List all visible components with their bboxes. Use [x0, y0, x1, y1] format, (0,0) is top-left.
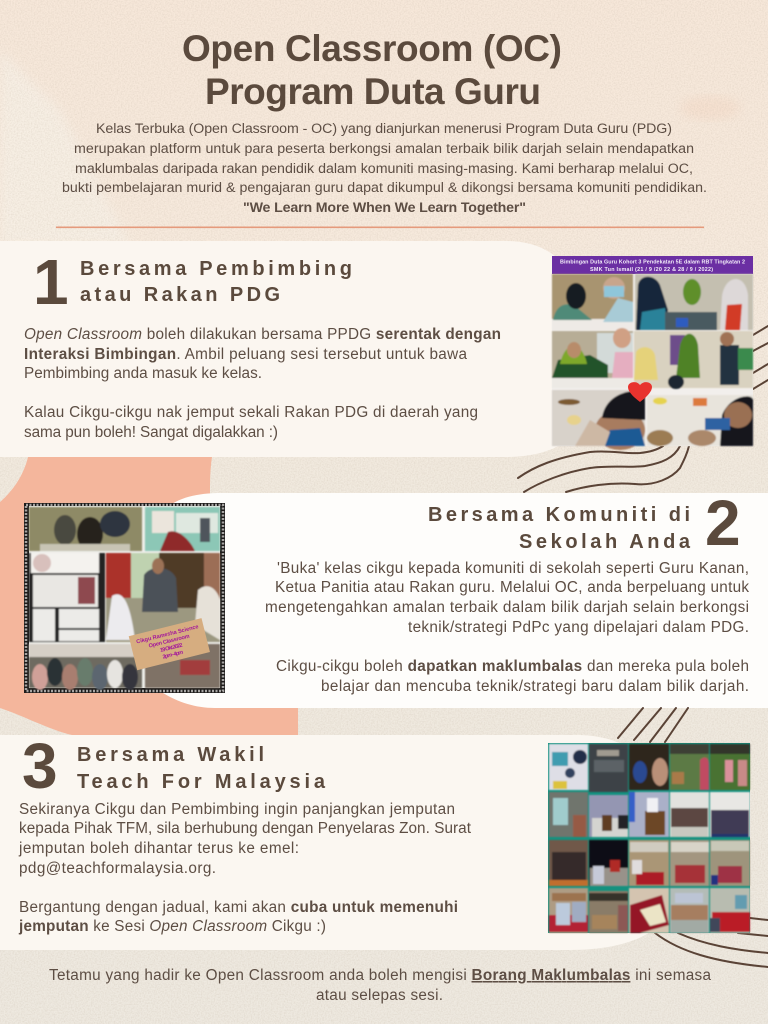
text block: section 2: 'Buka' kelas cikgu kepada komuniti di sekolah seperti Guru Kanan,	[277, 560, 749, 577]
text block: section 3: Bergantung dengan jadual, kami akan cuba untuk memenuhi	[19, 899, 458, 916]
heading: section 2	[428, 487, 741, 559]
title: Open Classroom (OC)	[182, 28, 562, 69]
panel: section 2 background	[163, 493, 768, 708]
intro text	[62, 121, 707, 216]
decorative curve group: section 1	[518, 326, 768, 492]
text block: section 2	[265, 560, 749, 695]
intro text: Kelas Terbuka (Open Classroom - OC) yang dianjurkan menerusi Program Duta Guru (PDG)	[96, 121, 672, 137]
text block: section 3: pdg@teachformalaysia.org.	[19, 860, 216, 877]
collage header banner	[552, 256, 753, 274]
text block: section 1: Pembimbing anda masuk ke kelas.	[24, 365, 262, 382]
heading: section 1: atau Rakan PDG	[80, 284, 280, 306]
text block: section 3: jemputan boleh dihantar terus ke emel:	[18, 840, 299, 857]
text block: section 2: Ketua Panitia atau Rakan guru. Melalui OC, anda berpeluang untuk	[275, 579, 749, 596]
text block: section 1: Kalau Cikgu-cikgu nak jemput sekali Rakan PDG di daerah yang	[24, 404, 478, 421]
heading: section 1: Bersama Pembimbing	[80, 258, 352, 280]
intro text: maklumbalas daripada rakan pendidik dalam komuniti masing-masing. Kami berharap melalui OC,	[75, 161, 693, 177]
heading: section 3	[22, 730, 326, 802]
text block: section 1: sama pun boleh! Sangat digalakkan :)	[24, 424, 278, 441]
decorative curve group: section 3	[618, 708, 768, 967]
heading: section 3: Teach For Malaysia	[77, 771, 326, 793]
footer text: Tetamu yang hadir ke Open Classroom anda boleh mengisi Borang Maklumbalas ini semasa	[49, 967, 711, 984]
collage header banner: Bimbingan Duta Guru Kohort 3 Pendekatan 5E dalam RBT Tingkatan 2	[560, 260, 745, 266]
text block: section 2: mengetengahkan amalan terbaik dalam bilik darjah selain berkongsi	[265, 599, 749, 616]
text block: section 3: Sekiranya Cikgu dan Pembimbing ingin panjangkan jemputan	[19, 801, 455, 818]
title: Program Duta Guru	[205, 71, 541, 112]
intro text: "We Learn More When We Learn Together"	[243, 200, 526, 216]
text block: section 1: Interaksi Bimbingan. Ambil peluang sesi tersebut untuk bawa	[24, 346, 467, 363]
intro text: merupakan platform untuk para peserta berkongsi amalan terbaik bilik darjah selain mendapatkan	[74, 141, 694, 157]
photo collage: section 3	[548, 743, 750, 933]
photo collage: section 2	[24, 503, 225, 693]
title	[182, 28, 562, 112]
panel: section 1 background	[0, 241, 560, 457]
caption card	[129, 618, 210, 670]
heading: section 2: Bersama Komuniti di	[428, 504, 690, 526]
icon: red heart	[628, 382, 652, 402]
text block: section 3	[18, 801, 472, 935]
text block: section 1: Open Classroom boleh dilakukan bersama PPDG serentak dengan	[24, 326, 501, 343]
caption card: Cikgu Ramesha Science	[136, 624, 199, 645]
heading: section 1	[33, 246, 352, 318]
caption card: 2pm - 4pm	[162, 650, 184, 661]
panel: section 3 background	[0, 735, 660, 950]
text block: section 3: jemputan ke Sesi Open Classroom Cikgu :)	[18, 918, 326, 935]
number 2: 2	[705, 487, 741, 559]
text block: section 2: belajar dan mencuba teknik/strategi baru dalam bilik darjah.	[321, 678, 749, 695]
intro text: bukti pembelajaran murid & pengajaran guru dapat dikumpul & dikongsi bersama komuniti pendidikan.	[62, 180, 707, 196]
collage header banner: SMK Tun Ismail (21 / 9 /20 22 & 28 / 9 / 2022)	[590, 267, 713, 273]
text block: section 3: kepada Pihak TFM, sila berhubung dengan Penyelaras Zon. Surat	[19, 820, 472, 837]
text block: section 2: Cikgu-cikgu boleh dapatkan maklumbalas dan mereka pula boleh	[276, 658, 749, 675]
number 1: 1	[33, 246, 69, 318]
photo collage: section 1	[552, 256, 753, 450]
salmon blob behind section 2	[0, 457, 298, 735]
number 3: 3	[22, 730, 58, 802]
heading: section 3: Bersama Wakil	[77, 744, 264, 766]
divider rule	[56, 226, 704, 228]
text block: section 1	[24, 326, 501, 441]
footer text	[49, 967, 711, 1004]
caption card: Open Classroom	[148, 634, 190, 650]
caption card: 19 Okt 2022	[160, 643, 183, 654]
footer text: atau selepas sesi.	[316, 987, 443, 1004]
heading: section 2: Sekolah Anda	[519, 531, 691, 553]
text block: section 2: teknik/strategi PdPc yang dipelajari dalam PDG.	[408, 619, 749, 636]
